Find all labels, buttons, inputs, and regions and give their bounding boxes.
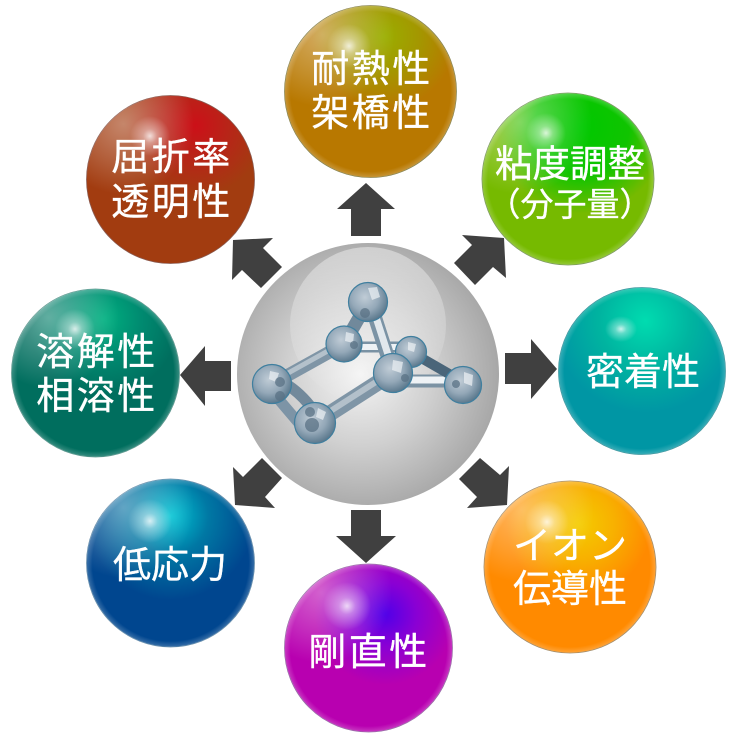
sphere: low stress [86,479,254,647]
molecule [252,282,482,444]
sphere: ion conductivity: イオン [513,526,627,568]
sphere: low stress: 低応力 [113,545,227,587]
sphere: adhesion: 密着性 [586,352,700,394]
sphere: refractive index: 透明性 [111,182,233,224]
sphere: solubility [12,289,180,457]
sphere: adhesion [558,288,726,454]
arrow: up left [232,238,282,288]
arrow: right [505,339,557,399]
atom facets [269,287,473,420]
arrow: down right [459,458,509,508]
sphere: rigidity: 剛直性 [308,632,430,674]
atoms [396,336,426,368]
arrow: down [336,510,396,563]
sphere: refractive index: 屈折率 [111,137,233,179]
arrow: left [180,346,231,406]
sphere: solubility: 相溶性 [36,376,158,418]
sphere: viscosity adjustment: 粘度調整 [495,143,645,185]
sphere: ion conductivity [484,481,656,653]
sphere: viscosity adjustment: （分子量） [488,186,652,223]
sphere: heat resistance [284,6,456,178]
arrow: down left [233,458,282,508]
sphere: rigidity [284,564,452,732]
arrow: up right [454,235,506,285]
center sphere [237,243,499,505]
sphere: ion conductivity: 伝導性 [513,569,627,611]
arrow: up [337,183,395,236]
sphere: heat resistance: 架橋性 [311,93,433,135]
sphere: heat resistance: 耐熱性 [311,49,433,91]
sphere: viscosity adjustment [482,93,654,265]
bonds [272,302,463,428]
sphere: refractive index [86,96,254,264]
sphere: solubility: 溶解性 [36,332,158,374]
